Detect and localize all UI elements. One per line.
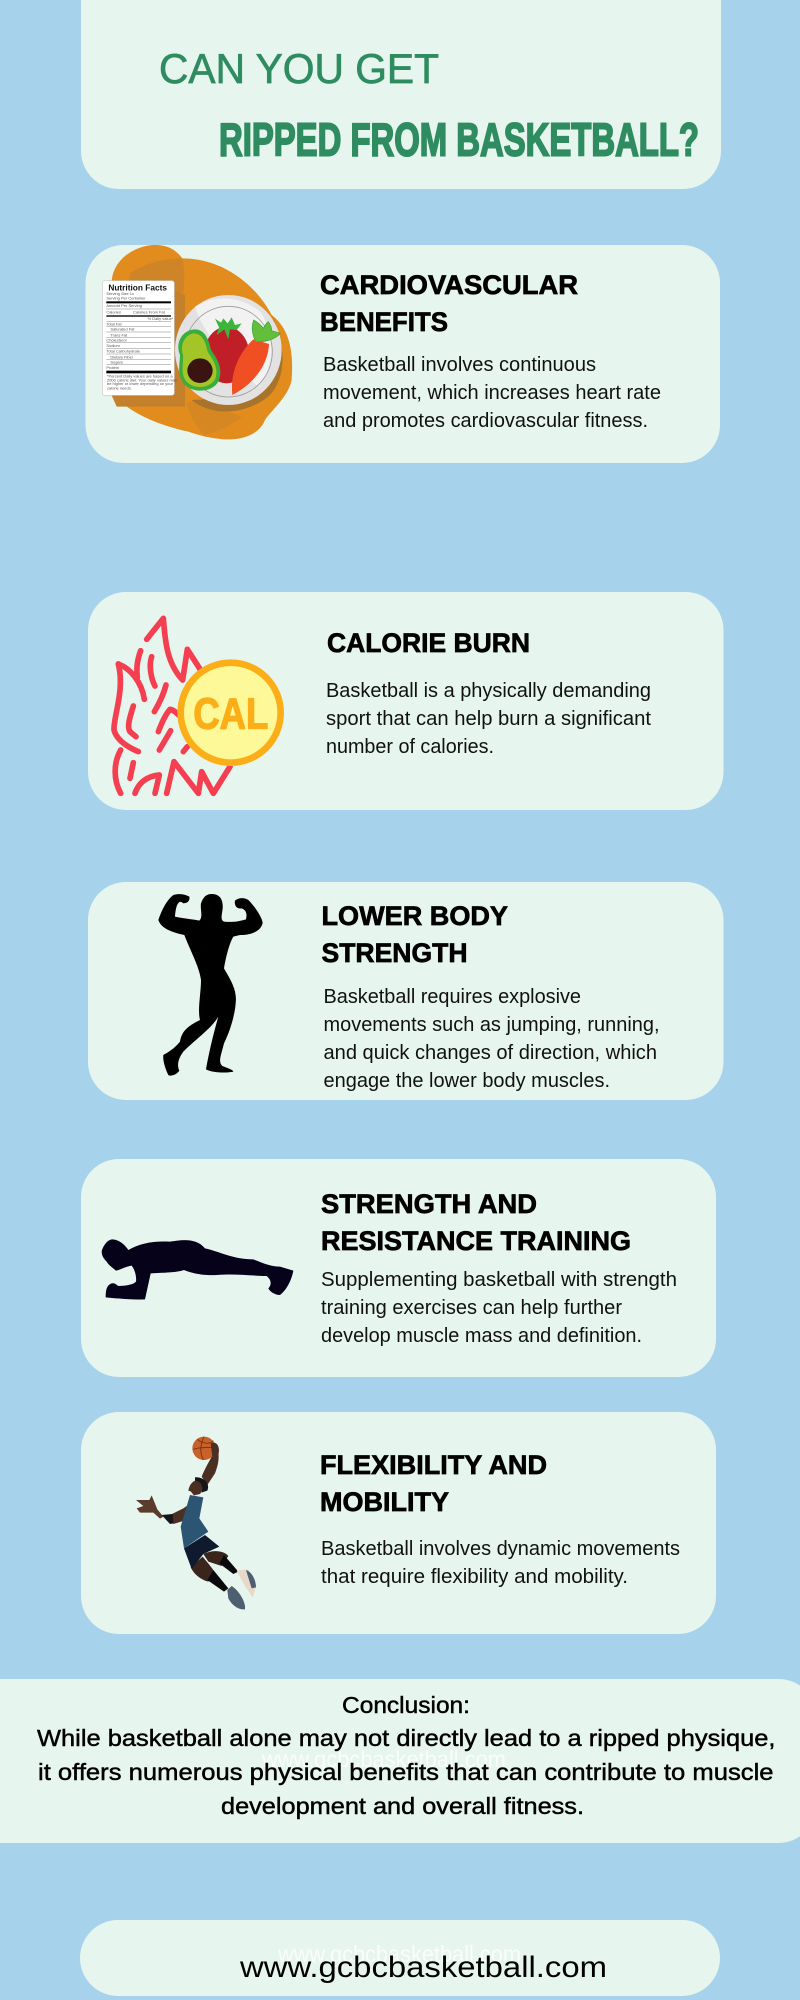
body text: Supplementing basketball with strength	[321, 1269, 677, 1291]
icon: nutrition facts and food plate: 2000 calorie diet. Your daily values may	[107, 377, 177, 382]
heading	[322, 901, 508, 968]
body text: and quick changes of direction, which	[324, 1042, 657, 1064]
icon: nutrition facts and food plate: Serving Per Container	[106, 296, 146, 301]
body text	[324, 986, 660, 1092]
icon: nutrition facts and food plate: Sugars	[110, 360, 123, 365]
conclusion text: Conclusion:	[342, 1692, 470, 1718]
conclusion text	[37, 1692, 775, 1819]
heading: STRENGTH AND	[321, 1189, 537, 1219]
body text: Basketball requires explosive	[324, 986, 581, 1008]
icon: nutrition facts and food plate: calorie needs.	[107, 385, 132, 390]
icon: nutrition facts and food plate: Serving Size 1c	[106, 291, 134, 296]
body text: sport that can help burn a significant	[326, 708, 651, 730]
conclusion text: While basketball alone may not directly lead to a ripped physique,	[37, 1725, 775, 1751]
body text	[321, 1538, 680, 1588]
icon: nutrition facts and food plate: Cholesterol	[106, 337, 127, 342]
website url: www.gcbcbasketball.com	[239, 1951, 607, 1984]
body text: movement, which increases heart rate	[323, 382, 661, 404]
body text: Basketball involves dynamic movements	[321, 1538, 680, 1560]
icon: nutrition facts and food plate: be higher or lower depending on your	[107, 381, 174, 386]
panel: cardiovascular benefits	[86, 245, 720, 463]
icon: bodybuilder silhouette	[158, 894, 263, 1076]
icon: nutrition facts and food plate: Total Carbohydrate	[106, 349, 141, 354]
icon: nutrition facts and food plate: Amount Per Serving	[106, 303, 142, 308]
panel: lower body strength	[88, 882, 724, 1100]
icon: nutrition facts and food plate: Saturated Fat	[110, 327, 135, 332]
heading: CARDIOVASCULAR	[320, 270, 578, 300]
panel: calorie burn	[88, 592, 724, 810]
icon: nutrition facts and food plate: Protein	[106, 365, 119, 370]
panel: flexibility and mobility	[81, 1412, 716, 1634]
panel: website footer	[80, 1920, 720, 1996]
icon: nutrition facts and food plate: Trans Fat	[110, 332, 128, 337]
panel: conclusion	[0, 1679, 800, 1843]
conclusion text: it offers numerous physical benefits that can contribute to muscle	[38, 1759, 774, 1785]
body text	[326, 680, 651, 758]
conclusion text: development and overall fitness.	[221, 1793, 584, 1819]
heading: MOBILITY	[320, 1487, 449, 1517]
body text: engage the lower body muscles.	[324, 1070, 610, 1092]
icon: nutrition facts and food plate: Nutrition Facts	[108, 284, 168, 293]
title line 1: CAN YOU GET	[159, 45, 439, 92]
icon: nutrition facts and food plate: Calories	[106, 310, 121, 315]
heading: RESISTANCE TRAINING	[321, 1226, 631, 1256]
icon: nutrition facts and food plate: Sodium	[106, 343, 121, 348]
heading: FLEXIBILITY AND	[320, 1450, 547, 1480]
watermark text: www.gcbcbasketball.com	[261, 1746, 506, 1772]
panel: strength and resistance training	[81, 1159, 716, 1377]
heading	[321, 1189, 631, 1256]
body text: develop muscle mass and definition.	[321, 1325, 642, 1347]
icon: nutrition facts and food plate: Calories From Fat	[133, 310, 166, 315]
icon: flame with CAL coin: CAL	[193, 691, 268, 739]
heading: BENEFITS	[320, 307, 448, 337]
body text: Basketball is a physically demanding	[326, 680, 651, 702]
heading: STRENGTH	[322, 938, 468, 968]
body text: number of calories.	[326, 736, 494, 758]
panel: title	[81, 0, 721, 189]
heading: CALORIE BURN	[327, 628, 530, 658]
body text	[323, 354, 661, 432]
icon: nutrition facts and food plate: % Daily value*	[148, 316, 174, 321]
icon: flame with CAL coin	[114, 618, 281, 793]
icon: nutrition facts and food plate	[102, 245, 292, 439]
heading: LOWER BODY	[322, 901, 508, 931]
heading	[320, 270, 578, 337]
icon: basketball player dunking	[136, 1437, 256, 1609]
icon: plank silhouette	[102, 1239, 293, 1299]
icon: nutrition facts and food plate: Dietary Fiber	[110, 354, 134, 359]
watermark text: www.gcbcbasketball.com	[277, 1941, 521, 1967]
body text: movements such as jumping, running,	[324, 1014, 660, 1036]
icon: nutrition facts and food plate: *Percent Daily values are based on a	[107, 374, 173, 379]
body text: training exercises can help further	[321, 1297, 622, 1319]
body text: and promotes cardiovascular fitness.	[323, 410, 648, 432]
icon: nutrition facts and food plate: Total Fat	[106, 322, 123, 327]
body text: Basketball involves continuous	[323, 354, 596, 376]
body text	[321, 1269, 677, 1347]
heading	[320, 1450, 547, 1517]
body text: that require flexibility and mobility.	[321, 1566, 628, 1588]
